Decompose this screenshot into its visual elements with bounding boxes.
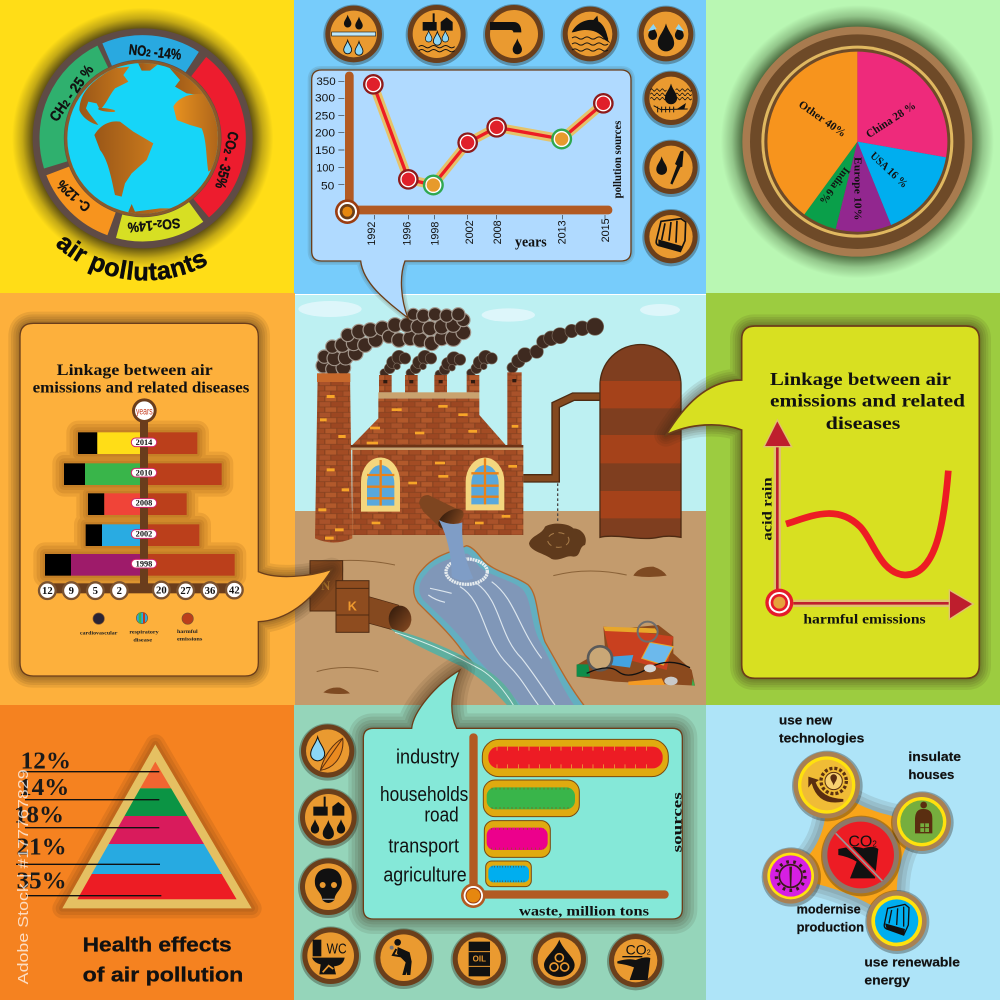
pie frame [721,5,994,278]
x axis year labels [366,215,612,246]
x axis title: years [515,235,547,251]
action labels: insulate [908,750,961,764]
panel: right curve chart [666,326,979,678]
heading: Linkage between air [57,362,213,379]
panel: pyramid of health effects [14,744,252,987]
action labels: use renewable [864,956,960,970]
scale badges: 9 [69,586,74,597]
pie slices [767,52,947,232]
node: insulate houses [891,791,954,854]
curve [786,471,948,575]
label: CO2: CO2 - 35% [211,130,241,190]
scale badges: 27 [180,586,192,597]
pie label: Europe: Europe 10% [851,157,863,220]
panel: central factory scene [295,295,706,707]
icons: top row and right column [323,4,700,266]
bar: industry [482,739,668,777]
x arrow [793,590,973,619]
pie label: USA: USA 16 % [868,150,910,191]
panel: air pollutants globe [14,9,272,281]
y axis title: sources [671,792,686,852]
pie label: Other: Other 40% [796,99,848,140]
action labels [779,713,961,987]
panel: waste bar chart [363,670,686,920]
percentages [14,747,71,894]
y axis labels [315,76,344,193]
action labels: energy [864,973,910,987]
scale badges: 42 [229,585,240,596]
axes [335,72,612,224]
data line [373,84,603,185]
junk pile [577,622,695,686]
label: SO2: SO2-14% [127,215,181,236]
y axis labels: 100 [316,162,334,174]
icon: WC toilet: WC [327,942,347,958]
icon: CO2 chimney [607,933,664,990]
hub connector [791,785,922,921]
percentages: 35% [17,867,67,894]
percentages: 14% [19,774,69,801]
globe [64,60,223,223]
rocks [323,567,667,694]
icon: factory water pollution [406,4,468,66]
right chimney smoke [507,318,604,373]
sludge puddle [529,524,586,560]
legend: cardiovascular [80,631,118,637]
heading [33,362,249,396]
icon: oil barrel: OIL [473,955,486,964]
drip [557,483,558,521]
icon: biohazard drop [531,931,588,989]
lower pipe and teal stream [369,597,519,707]
icon: renewable barrel [642,209,700,266]
stock credit: Adobe Stock | #177767829 [16,769,32,984]
percentages: 21% [17,833,67,860]
icon: dolphin [561,6,619,64]
small chimney smoke [380,350,497,379]
icon: three drops [637,6,695,64]
legend: emissions [177,636,202,642]
ring of pollutants [12,8,273,269]
scale badges [39,582,243,599]
action labels: production [797,921,864,935]
source labels: households [380,783,468,806]
y axis labels: 250 [315,111,335,123]
node: modernise production [762,847,821,907]
scale badges: 2 [117,586,122,597]
year pills: 2014 [136,438,153,447]
year pills: 2010 [136,468,152,477]
x axis year labels: 1996 [401,222,413,246]
clouds [298,301,680,322]
outflow pipe [419,495,464,529]
x axis year labels: 1998 [429,222,441,246]
bars [45,432,235,576]
source labels [380,745,468,887]
year pills [131,438,157,568]
years badge [132,398,157,423]
heading: diseases [826,413,900,433]
y axis labels: 150 [315,145,335,157]
data markers [363,74,614,194]
origin marker [765,589,793,617]
icon: sick person [373,928,434,989]
node: centre no CO2: CO2 [848,834,877,851]
fertiliser barrels: K [348,600,358,614]
icon: drop and leaf [299,723,356,781]
left window [361,457,400,512]
icon: WC toilet [300,926,361,987]
icon: drop and syringe [642,140,700,197]
percentages: 18% [14,801,64,828]
callout box [312,70,631,318]
y axis title: pollution sources [610,120,624,198]
axes [461,733,669,908]
heading: emissions and related diseases [33,379,249,396]
legend: disease [133,637,153,643]
callout box [20,323,332,676]
scale badges: 36 [205,586,216,597]
connecting pipe [523,397,600,478]
icon: factories and drops [298,788,359,849]
y axis labels: 300 [315,92,335,104]
x axis year labels: 2015 [600,218,612,242]
x axis title: harmful emissions [803,612,926,627]
heading: air pollutants: air pollutants [56,237,207,281]
legend [80,612,202,643]
years badge: years [136,406,153,417]
node: centre no CO2 [821,816,902,896]
big smoke cloud [316,308,471,376]
pyramid [62,744,252,908]
year pills: 2008 [136,499,152,508]
legend: respiratory [129,630,159,636]
leader lines [16,772,161,896]
panel: pollution line chart [312,70,631,318]
icon: dripping tap [483,4,545,66]
label: NO2: NO2 -14% [128,42,182,64]
icon: oil barrel [451,931,508,989]
pie label: China: China 28 % [864,100,918,141]
y axis labels: 200 [315,128,335,140]
icon: CO2 chimney: CO2 [626,942,651,958]
percentages: 12% [21,747,71,774]
icons: bottom row and left column [298,723,664,990]
x axis year labels: 1992 [366,222,378,246]
factory tall chimney [315,373,352,542]
scale badges: 20 [156,585,167,596]
source labels: road [424,804,459,827]
heading [770,369,965,433]
x axis title: waste, million tons [519,905,650,920]
action labels: houses [908,768,954,782]
legend: harmful [177,629,198,635]
icon: skull [298,857,359,918]
bar: transport [484,821,550,857]
label: C: C- 12% [53,177,94,215]
x axis year labels: 2013 [556,220,568,244]
label: CH2: CH2 - 25 % [47,63,97,125]
source labels: transport [388,835,459,858]
silo tank [600,344,681,538]
panel: CO2 solutions diagram [762,713,961,987]
sky [295,295,706,512]
river [414,546,585,707]
ground [295,511,706,705]
y arrow [764,420,792,590]
source labels: agriculture [383,864,467,887]
y axis title: acid rain [761,477,776,541]
right window [466,458,504,510]
heading: Health effects [83,934,232,957]
action labels: technologies [779,731,864,745]
action labels: use new [779,713,832,727]
scale badges: 12 [42,586,53,597]
callout box [363,670,682,919]
factory building [351,372,523,535]
node: new technologies [792,751,863,821]
axes [47,417,235,593]
x axis year labels: 2008 [492,220,504,244]
heading: Linkage between air [770,369,951,389]
heading: of air pollution [83,964,243,987]
y axis labels: 50 [321,181,334,193]
waterfall from pipe [439,520,473,580]
year pills: 2002 [136,530,152,539]
bar: agriculture [486,861,531,887]
callout box [666,326,979,678]
heading: emissions and related [770,391,965,411]
pie label: India: India 6% [817,165,852,206]
panel: left bar chart [20,323,332,676]
x axis year labels: 2002 [464,220,476,244]
action labels: modernise [797,902,861,916]
ground marks [315,560,627,672]
icon: filtered drops [323,5,384,65]
panel: top right pie chart [721,5,994,278]
node: renewable energy [865,890,929,954]
icon: drop and dead fish [642,71,700,128]
fertiliser barrels [310,561,369,632]
heading [83,934,243,987]
bar: households [483,780,579,817]
year pills: 1998 [136,559,152,568]
source labels: industry [396,745,460,768]
y axis labels: 350 [316,76,336,88]
fertiliser barrels: N [321,579,330,593]
scale badges: 5 [93,586,98,597]
